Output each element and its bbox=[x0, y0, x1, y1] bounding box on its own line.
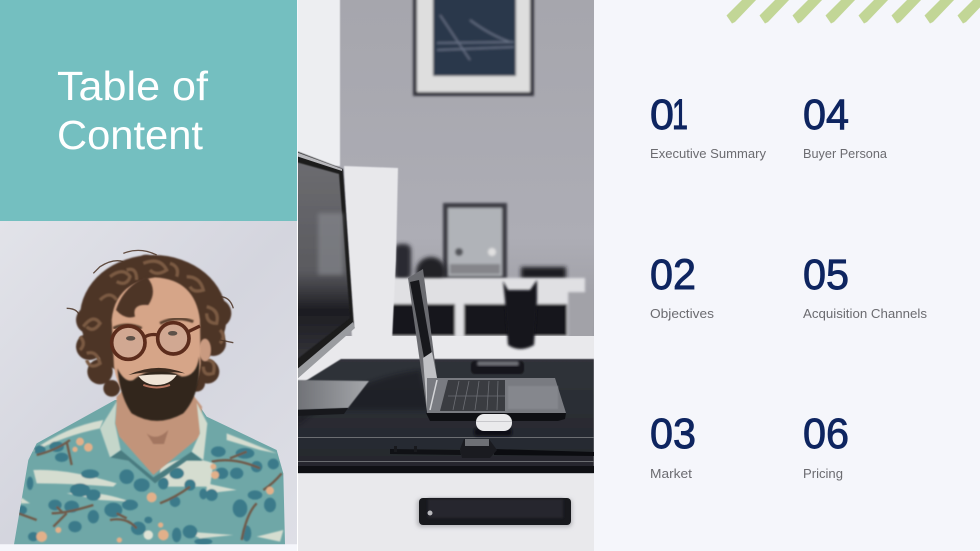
eyebrows bbox=[113, 319, 193, 328]
framed art on the wall bbox=[413, 0, 534, 96]
face bbox=[110, 276, 202, 391]
white column bbox=[296, 0, 340, 166]
item 03: Market bbox=[650, 410, 696, 481]
laptop bbox=[408, 269, 566, 421]
dark objects bbox=[394, 244, 566, 287]
item 02: Objectives bbox=[650, 251, 715, 321]
photo: smiling man portrait bbox=[0, 221, 300, 547]
glasses bbox=[112, 323, 189, 359]
beard bbox=[117, 357, 199, 421]
earbud case bbox=[474, 414, 512, 436]
monitor stand bbox=[296, 380, 369, 410]
collar underside bbox=[110, 450, 203, 483]
item 01: Executive Summary bbox=[650, 91, 766, 161]
neck bbox=[115, 387, 202, 475]
item 05: Acquisition Channels bbox=[803, 251, 928, 321]
item 03: Market: 03 bbox=[650, 410, 696, 458]
remote bbox=[471, 361, 524, 374]
heading: Table of Content bbox=[57, 63, 209, 158]
monitor bbox=[296, 151, 355, 380]
item 01: Executive Summary: 1 bbox=[672, 91, 688, 139]
item 04: Buyer Persona: Buyer Persona bbox=[803, 146, 888, 161]
item 04: Buyer Persona: 04 bbox=[803, 91, 849, 139]
decorative green stripes bbox=[726, 0, 980, 24]
item 04: Buyer Persona bbox=[803, 91, 888, 161]
item 02: Objectives: Objectives bbox=[650, 306, 715, 321]
item 01: Executive Summary: Executive Summary bbox=[650, 146, 766, 161]
hair highlights bbox=[80, 261, 223, 374]
item 06: Pricing bbox=[803, 410, 849, 481]
phone bbox=[417, 498, 572, 527]
item 01: Executive Summary: 0 bbox=[650, 91, 674, 139]
item 05: Acquisition Channels: Acquisition Channels bbox=[803, 306, 928, 321]
vase bbox=[344, 166, 398, 340]
sideboard bbox=[391, 278, 594, 338]
item 02: Objectives: 02 bbox=[650, 251, 696, 299]
photo: blurred desk with laptop and phone bbox=[296, 0, 594, 551]
stray curls bbox=[67, 250, 233, 343]
hair back bbox=[76, 255, 231, 397]
panel: title block bbox=[0, 0, 297, 221]
item 06: Pricing: Pricing bbox=[803, 466, 843, 481]
item 06: Pricing: 06 bbox=[803, 410, 849, 458]
small frame on sideboard bbox=[443, 203, 507, 279]
desk surface bbox=[298, 336, 594, 551]
shirt bbox=[14, 400, 285, 544]
heading: Table of Content: Table of bbox=[57, 63, 209, 109]
desk mat bbox=[296, 359, 594, 473]
ear bbox=[199, 339, 211, 361]
smile bbox=[138, 374, 177, 385]
watch bbox=[390, 439, 594, 458]
heading: Table of Content: Content bbox=[57, 112, 204, 158]
collar bbox=[100, 402, 207, 460]
lens bbox=[503, 280, 537, 349]
item 05: Acquisition Channels: 05 bbox=[803, 251, 849, 299]
item 03: Market: Market bbox=[650, 466, 692, 481]
